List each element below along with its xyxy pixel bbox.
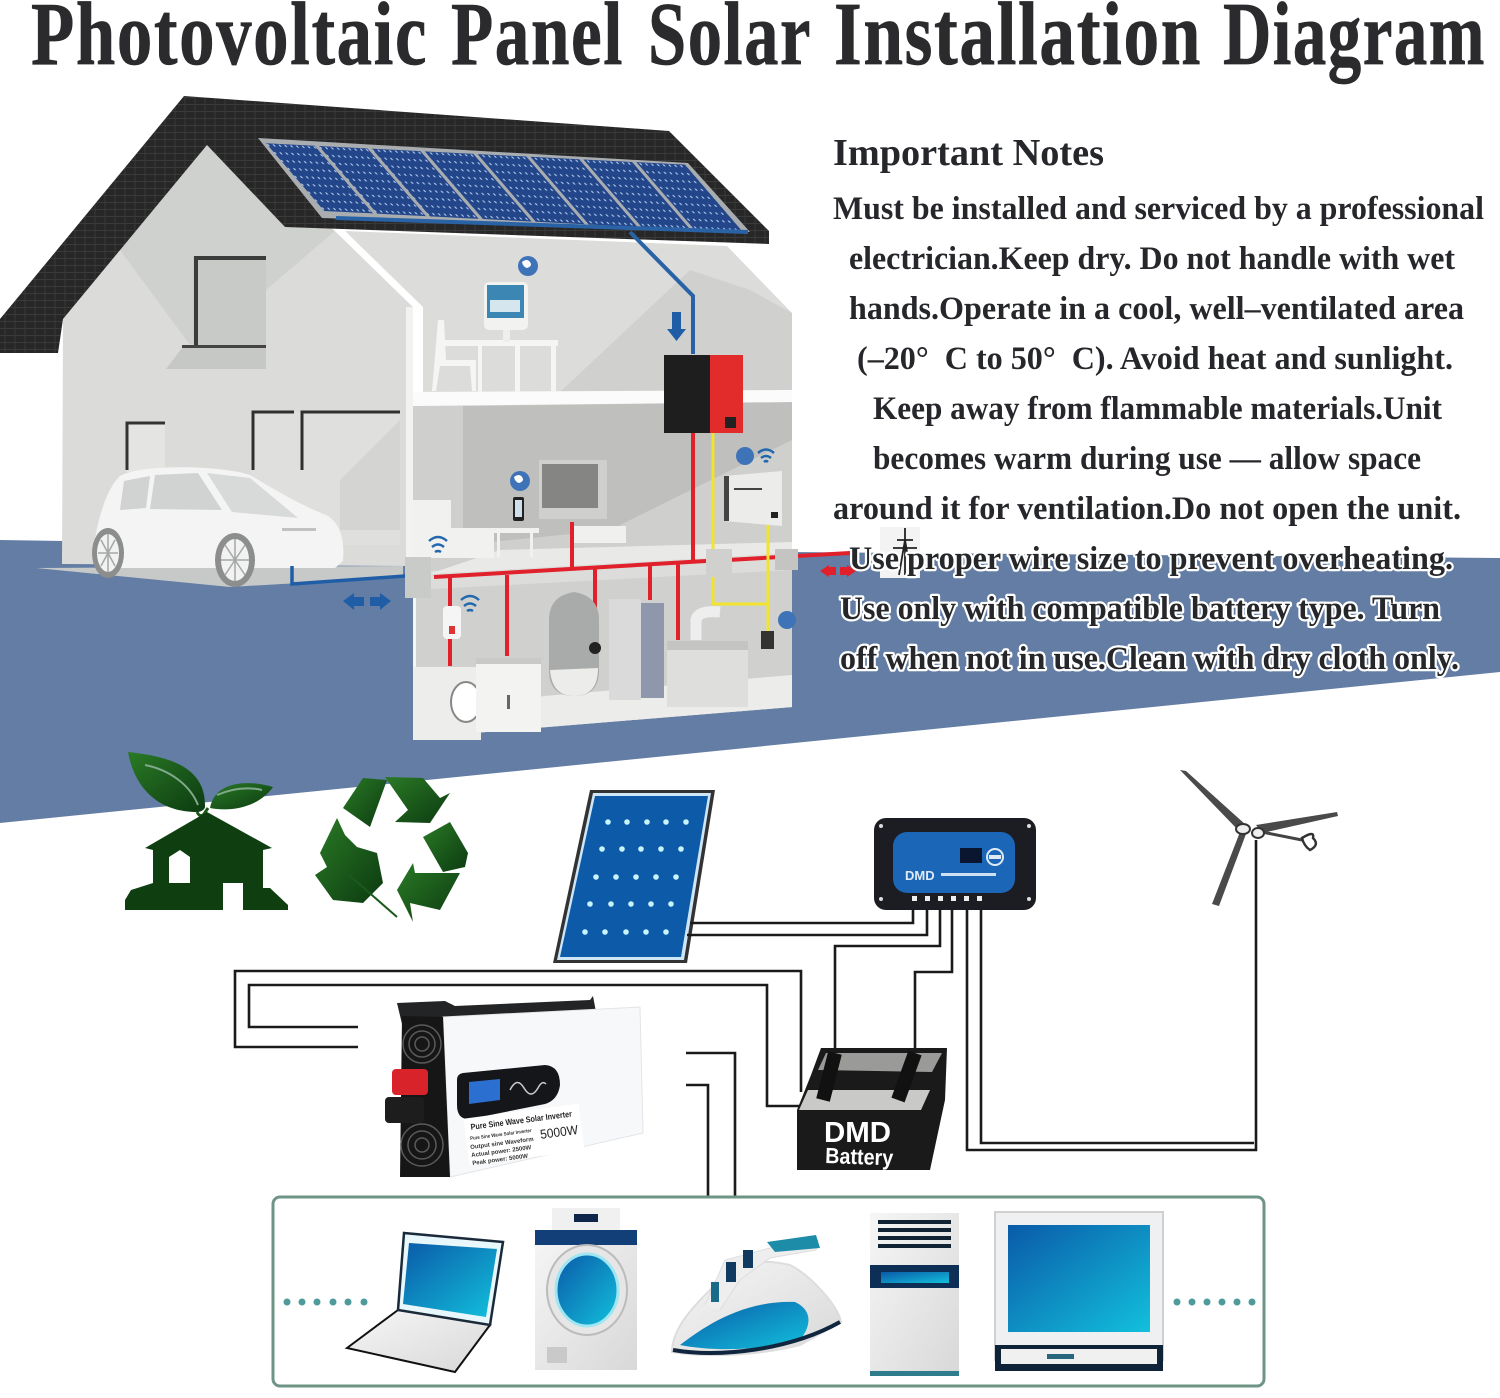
dotted connector right bbox=[1174, 1298, 1256, 1306]
dotted connector left bbox=[284, 1298, 368, 1306]
notes body: electrician.Keep dry. Do not handle with wet bbox=[849, 241, 1455, 277]
computer monitor bbox=[484, 282, 528, 342]
wifi icon basement bbox=[461, 596, 479, 611]
black terminal bbox=[385, 1097, 424, 1123]
sofa and table bbox=[413, 500, 539, 558]
notes body: Must be installed and serviced by a professional bbox=[833, 191, 1484, 227]
grid connection: pylon and arrow bbox=[820, 527, 920, 578]
ground shadow bbox=[36, 566, 403, 587]
pure sine wave inverter bbox=[385, 996, 643, 1177]
notes body: off when not in use.Clean with dry cloth only. bbox=[840, 641, 1459, 677]
wall edge highlight bbox=[335, 231, 423, 392]
battery label: Battery bbox=[825, 1143, 894, 1170]
notes body: Use proper wire size to prevent overheating. bbox=[849, 541, 1453, 577]
fan housing bbox=[400, 1016, 450, 1177]
dryer bbox=[476, 658, 541, 732]
phone bbox=[513, 497, 524, 521]
product label: Pure Sine Wave Solar Inverter bbox=[470, 1109, 573, 1132]
globe icon upstairs bbox=[518, 256, 538, 276]
floor slab bbox=[413, 390, 792, 406]
icon: laptop bbox=[347, 1233, 503, 1372]
smart plug bbox=[443, 606, 461, 639]
notes body: becomes warm during use — allow space bbox=[873, 441, 1421, 477]
charge controller: DMD bbox=[905, 868, 935, 883]
notes body bbox=[833, 191, 1484, 677]
breaker box bbox=[706, 549, 732, 577]
heat pump bbox=[667, 612, 748, 707]
desk and chair bbox=[432, 320, 558, 392]
notes body: Keep away from flammable materials.Unit bbox=[873, 391, 1442, 427]
small door window bbox=[126, 422, 165, 472]
small control box bbox=[761, 631, 774, 649]
blue down arrow bbox=[667, 312, 686, 341]
title bbox=[31, 0, 1486, 84]
yellow data wiring bbox=[713, 433, 768, 632]
basement wall edge bbox=[413, 570, 416, 738]
connection post bbox=[405, 557, 431, 598]
monitoring gateway bbox=[724, 471, 782, 526]
meter bbox=[775, 549, 798, 570]
red terminal bbox=[392, 1069, 428, 1095]
product label: 5000W bbox=[539, 1122, 579, 1142]
product label: Output sine Waveform bbox=[470, 1137, 534, 1151]
interior back walls bbox=[345, 231, 792, 738]
hot water tank bbox=[549, 592, 601, 696]
red AC wiring bbox=[434, 433, 850, 666]
roof bbox=[0, 96, 769, 353]
panel: AC appliances bbox=[273, 1197, 1264, 1386]
notes body: hands.Operate in a cool, well–ventilated area bbox=[849, 291, 1464, 327]
blue charging cable bbox=[292, 566, 405, 584]
product label: Peak power: 5000W bbox=[472, 1154, 529, 1167]
living room floor bbox=[429, 542, 792, 574]
important notes bbox=[833, 132, 1484, 677]
icon: recycle symbol with leaf bbox=[315, 777, 468, 922]
media cabinet bbox=[573, 526, 626, 543]
solar panel array bbox=[258, 138, 750, 232]
globe icon basement bbox=[778, 611, 796, 629]
solar panel bbox=[553, 790, 715, 963]
television bbox=[539, 460, 607, 519]
icon: eco house with leaves bbox=[125, 752, 288, 910]
blue ground band bbox=[0, 540, 1500, 823]
garage glass bbox=[251, 412, 400, 545]
product label: Actual power: 2500W bbox=[471, 1145, 532, 1159]
wiring diagram lines bbox=[235, 840, 1256, 1197]
icon: clothes iron bbox=[672, 1235, 841, 1355]
house cutaway illustration bbox=[0, 96, 850, 740]
notes body: around it for ventilation.Do not open the unit. bbox=[833, 491, 1461, 527]
globe icon living room bbox=[510, 471, 530, 491]
icon: television monitor bbox=[995, 1212, 1163, 1371]
boiler bbox=[609, 599, 664, 700]
white car bbox=[92, 467, 343, 587]
solar inverter unit bbox=[664, 355, 743, 433]
wifi icon living room bbox=[429, 537, 447, 552]
icon: washing machine bbox=[535, 1208, 637, 1370]
notes body: Use only with compatible battery type. Turn bbox=[840, 591, 1440, 627]
icon: air conditioner bbox=[870, 1213, 959, 1376]
upper window bbox=[182, 256, 266, 348]
battery bank bbox=[797, 1048, 947, 1170]
exterior front wall bbox=[62, 145, 413, 566]
display panel bbox=[457, 1065, 560, 1119]
globe and wifi icons bbox=[736, 447, 774, 465]
product label: Pure Sine Wave Solar Inverter bbox=[470, 1128, 532, 1142]
product label bbox=[463, 1104, 585, 1167]
battery label: DMD bbox=[824, 1117, 891, 1149]
wind turbine bbox=[1180, 770, 1338, 906]
mounting bracket bbox=[397, 996, 596, 1024]
notes body: (–20° C to 50° C). Avoid heat and sunlight. bbox=[857, 341, 1453, 377]
blue bidirectional arrow bbox=[343, 593, 391, 610]
washing machine bbox=[413, 667, 481, 740]
battery label bbox=[824, 1117, 894, 1170]
charge controller bbox=[874, 818, 1036, 910]
blue DC cable bbox=[336, 218, 748, 354]
notes heading: Important Notes bbox=[833, 132, 1104, 174]
inverter body bbox=[443, 1007, 643, 1177]
cooling fans bbox=[401, 1025, 443, 1166]
